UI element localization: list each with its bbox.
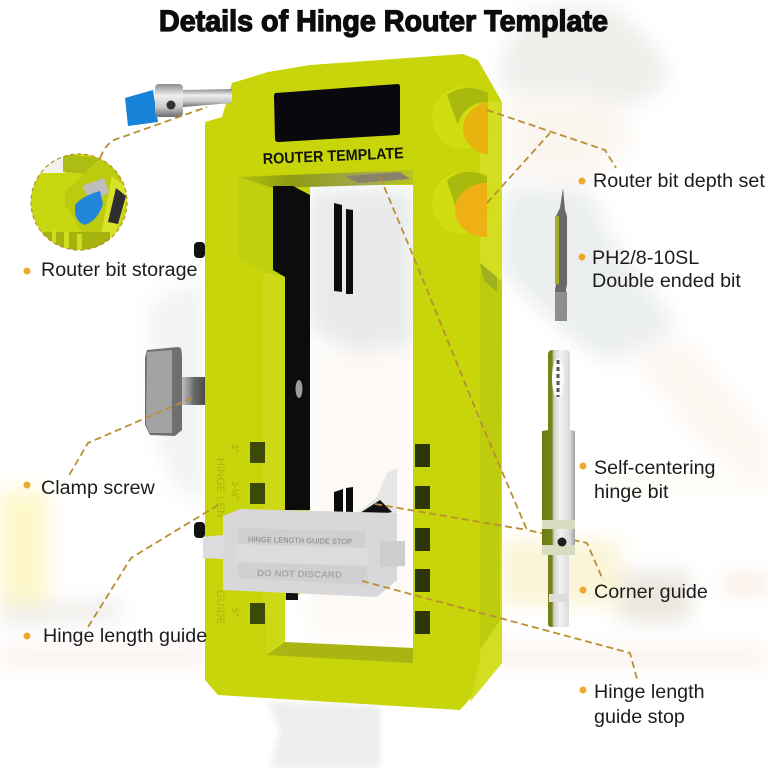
display window <box>274 84 400 142</box>
hinge size marks panel: GUIDE <box>214 590 226 625</box>
dashed leader lines <box>68 107 637 679</box>
label: self-centering hinge bit <box>580 457 715 503</box>
hinge size marks panel: 3-½" <box>230 481 240 500</box>
label: hinge length guide stop <box>580 681 705 728</box>
double ended bit <box>555 188 567 321</box>
curved corner guide <box>355 468 397 515</box>
clamp screw <box>145 347 205 436</box>
black screw knobs <box>194 242 205 538</box>
wood and tools <box>0 490 48 610</box>
shirt through window <box>310 190 413 350</box>
label: router bit depth set: Router bit depth set <box>593 170 765 192</box>
router template label: ROUTER TEMPLATE <box>262 145 404 168</box>
label: double ended bit <box>578 247 741 292</box>
face <box>505 95 630 185</box>
label: router bit storage: Router bit storage <box>41 259 198 281</box>
black rail behind window <box>273 186 353 600</box>
lower inner wall <box>263 272 285 655</box>
bottom ledge <box>267 642 413 663</box>
label: double ended bit: PH2/8-10SL <box>592 247 699 269</box>
hinge size marks panel: HINGE LEN <box>214 458 226 518</box>
hinge size marks panel: 3" <box>230 444 240 452</box>
side slot <box>480 263 502 650</box>
label: corner guide: Corner guide <box>594 581 708 603</box>
depth holes <box>432 87 494 237</box>
self-centering hinge bit <box>542 350 575 627</box>
label: hinge length guide: Hinge length guide <box>43 625 207 647</box>
label: hinge length guide stop: Hinge length <box>594 681 705 703</box>
hinge length guide stop: DO NOT DISCARD <box>257 568 343 580</box>
label: double ended bit: Double ended bit <box>592 270 741 292</box>
label: self-centering hinge bit: Self-centering <box>594 457 715 479</box>
arm <box>630 345 768 490</box>
hair <box>500 5 672 105</box>
title: Details of Hinge Router Template <box>159 5 608 38</box>
right slots <box>415 444 430 634</box>
hinge length guide stop: HINGE LENGTH GUIDE STOP <box>248 535 353 546</box>
router bit <box>125 84 232 126</box>
circular inset: stored bit <box>31 154 130 252</box>
router template body <box>205 54 502 710</box>
window top band <box>238 170 413 188</box>
hinge size marks panel <box>214 444 240 625</box>
leg below template <box>267 702 380 768</box>
hinge length guide stop <box>203 509 405 597</box>
label: hinge length guide stop: guide stop <box>594 706 685 728</box>
left shirt <box>150 280 205 497</box>
upper inner wall <box>238 177 285 277</box>
hinge size marks panel: 5" <box>230 608 240 616</box>
left slots <box>250 442 265 624</box>
light side face <box>470 100 502 702</box>
label: clamp screw: Clamp screw <box>41 477 156 499</box>
shirt <box>500 185 680 362</box>
corner guide plate at top of window <box>345 172 410 183</box>
label: self-centering hinge bit: hinge bit <box>594 481 669 503</box>
